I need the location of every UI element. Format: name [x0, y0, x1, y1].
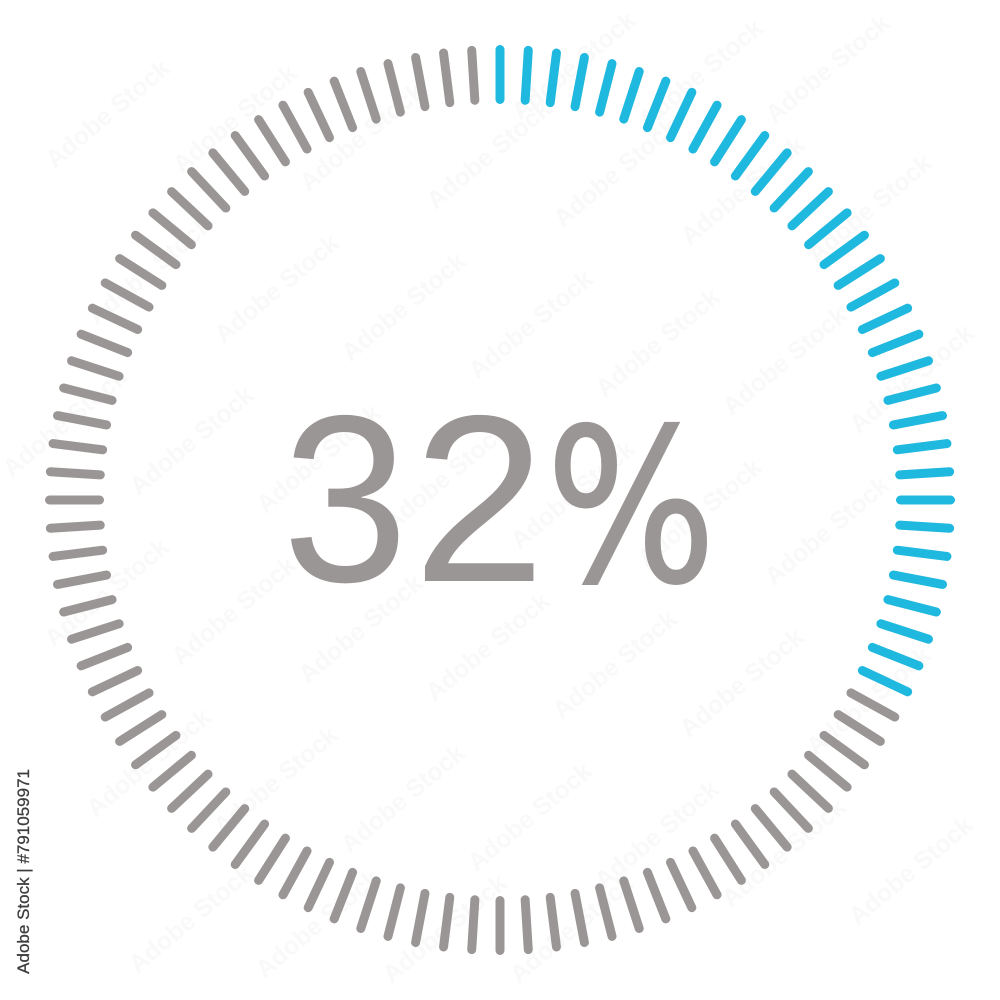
percentage value: 32% — [282, 367, 716, 632]
faint watermark pattern: Adobe Stock — [0, 363, 132, 483]
faint watermark pattern: Adobe Stock — [844, 319, 979, 439]
faint watermark pattern: Adobe Stock — [801, 641, 936, 761]
faint watermark pattern: Adobe Stock — [209, 229, 344, 349]
gauge: grey remaining ticks — [50, 50, 895, 950]
faint watermark pattern: Adobe Stock — [633, 14, 768, 134]
faint watermark pattern: Adobe Stock — [166, 551, 301, 671]
faint watermark pattern: Adobe Stock — [123, 859, 258, 979]
faint watermark pattern: Adobe Stock — [124, 381, 259, 501]
faint watermark pattern: Adobe Stock — [548, 113, 683, 233]
faint watermark pattern: Adobe Stock — [843, 811, 978, 931]
faint watermark pattern: Adobe Stock — [420, 587, 555, 707]
faint watermark pattern: Adobe Stock — [335, 739, 470, 859]
faint watermark pattern: Adobe Stock — [802, 149, 937, 269]
faint watermark pattern: Adobe Stock — [167, 59, 302, 179]
faint watermark pattern: Adobe Stock — [251, 399, 386, 519]
faint watermark pattern: Adobe Stock — [39, 533, 174, 653]
faint watermark pattern: Adobe Stock — [463, 265, 598, 385]
faint watermark pattern: Adobe Stock — [421, 95, 556, 215]
faint watermark pattern: Adobe Stock — [760, 9, 895, 129]
percentage value: 32%: 2 — [413, 367, 545, 632]
faint watermark pattern: Adobe Stock — [336, 247, 471, 367]
percentage value: 32%: 3 — [282, 367, 408, 632]
faint watermark pattern: Adobe Stock — [294, 77, 429, 197]
percentage value: 32%: % — [546, 384, 716, 632]
faint watermark pattern: Adobe Stock — [632, 453, 767, 573]
faint watermark pattern: Adobe Stock — [590, 283, 725, 403]
faint watermark pattern: Adobe Stock — [293, 569, 428, 689]
faint watermark pattern: Adobe Stock — [759, 471, 894, 591]
faint watermark pattern: Adobe Stock — [716, 793, 851, 913]
faint watermark pattern: Adobe Stock — [674, 623, 809, 743]
faint watermark pattern: Adobe Stock — [504, 869, 639, 989]
faint watermark pattern: Adobe Stock — [81, 703, 216, 823]
faint watermark pattern: Adobe Stock — [378, 417, 513, 537]
stock image id label: Adobe Stock | #791059971 — [14, 769, 33, 974]
faint watermark pattern: Adobe Stock — [462, 757, 597, 877]
faint watermark pattern: Adobe Stock — [250, 864, 385, 984]
faint watermark pattern: Adobe Stock — [82, 211, 217, 331]
faint watermark pattern: Adobe Stock — [589, 775, 724, 895]
faint watermark pattern: Adobe Stock — [717, 301, 852, 421]
faint watermark pattern: Adobe Stock — [675, 131, 810, 251]
faint watermark pattern: Adobe Stock — [547, 605, 682, 725]
faint watermark pattern: Adobe Stock — [506, 6, 641, 126]
faint watermark pattern: Adobe Stock — [40, 54, 175, 174]
faint watermark pattern: Adobe Stock — [377, 869, 512, 989]
faint watermark pattern: Adobe Stock — [208, 721, 343, 841]
gauge: blue progress ticks (32%) — [500, 50, 950, 692]
faint watermark pattern: Adobe Stock — [505, 435, 640, 555]
